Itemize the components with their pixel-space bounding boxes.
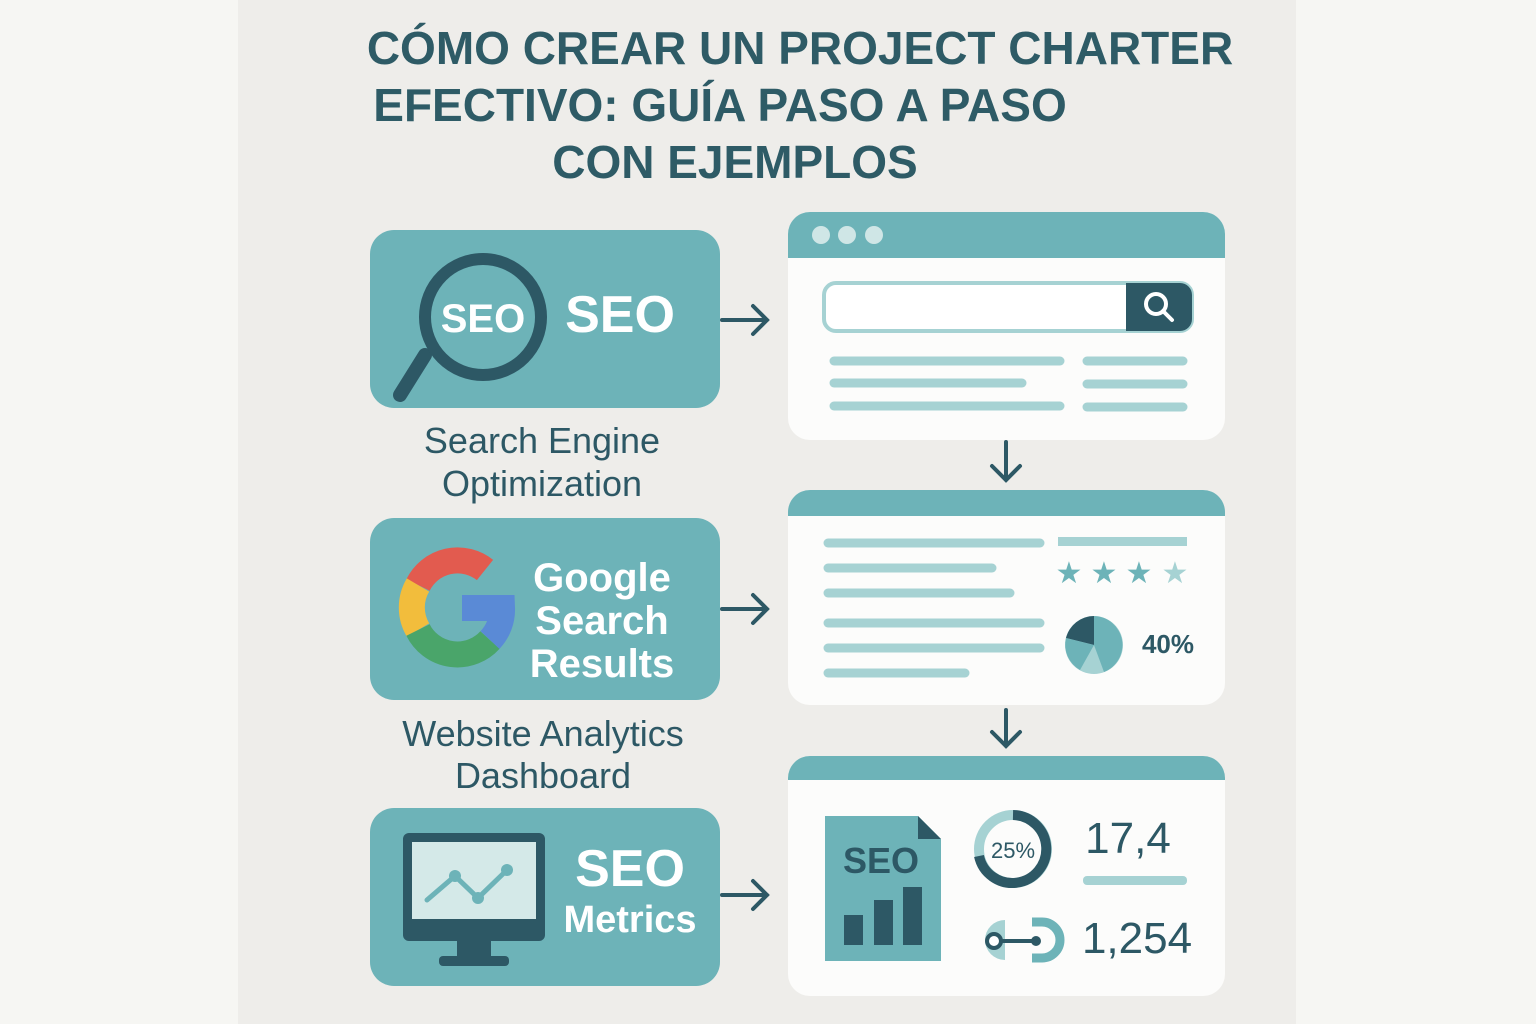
panel: SEO box [370, 230, 720, 408]
icon: magnifier: SEO [441, 297, 525, 341]
background panel [238, 0, 1296, 1024]
icon: link [985, 920, 1060, 960]
donut 25% [979, 815, 1047, 883]
icon: magnifier [400, 259, 541, 395]
title: EFECTIVO: GUÍA PASO A PASO [373, 79, 1067, 131]
stars: ★ [1091, 557, 1117, 590]
panel: metrics [788, 756, 1225, 996]
panel: Google box: Results [530, 642, 674, 686]
panel: metrics: 17,4 [1085, 814, 1171, 863]
caption: Search Engine Optimization [424, 420, 660, 504]
panel: Google box: Google [533, 556, 671, 600]
icon: google G [412, 560, 502, 654]
title: CON EJEMPLOS [552, 136, 918, 188]
panel: Google box: Search [535, 599, 669, 643]
title: CÓMO CREAR UN PROJECT CHARTER [367, 22, 1233, 74]
icon: seo document [825, 816, 941, 961]
icon: monitor [403, 833, 545, 966]
panel: SEO metrics box: Metrics [563, 899, 697, 941]
stars [1056, 557, 1188, 590]
stars: ★ [1162, 557, 1188, 590]
stars: ★ [1056, 557, 1082, 590]
panel: browser search [788, 212, 1225, 440]
panel: SEO metrics box: SEO [575, 840, 685, 898]
arrows right [722, 306, 1020, 909]
caption: Search Engine Optimization: Search Engine [424, 420, 660, 461]
icon: seo document: SEO [843, 840, 919, 881]
panel: SEO box: SEO [565, 286, 675, 344]
panel: SEO metrics box [370, 808, 720, 986]
caption: Website Analytics Dashboard [402, 713, 684, 796]
panel: Google box [370, 518, 720, 700]
panel: results [788, 490, 1225, 705]
donut 25%: 25% [991, 838, 1035, 863]
caption: Website Analytics Dashboard: Website Analytics [402, 713, 684, 754]
title [367, 22, 1233, 188]
pie chart [1065, 616, 1123, 674]
panel: results: 40% [1142, 629, 1194, 659]
stars: ★ [1126, 557, 1152, 590]
panel: metrics: 1,254 [1082, 914, 1192, 963]
caption: Search Engine Optimization: Optimization [442, 463, 642, 504]
search bar [824, 283, 1192, 331]
caption: Website Analytics Dashboard: Dashboard [455, 755, 631, 796]
